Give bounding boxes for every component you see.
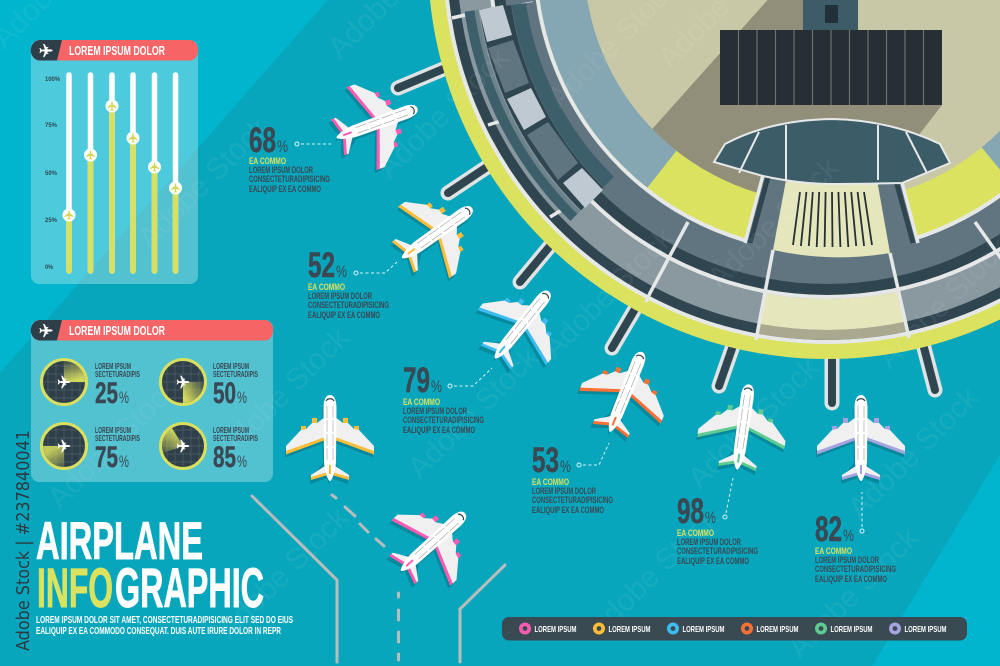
stat 52: CONSECTETURADIPISICING: [308, 300, 389, 311]
title: AIRPLANE: [36, 512, 203, 571]
stat 53: EALIQUIP EX EA COMMO: [532, 505, 604, 516]
radar stat 85: SECTETURADIPIS: [213, 433, 258, 443]
legend bar: [502, 617, 967, 640]
legend labels: LOREM IPSUM: [682, 624, 724, 634]
axis labels: 50%: [45, 170, 57, 177]
axis labels: 0%: [45, 264, 53, 271]
stat 79: EALIQUIP EX EA COMMO: [403, 425, 475, 436]
stat 68: CONSECTETURADIPISICING: [249, 174, 330, 185]
stat 82: CONSECTETURADIPISICING: [815, 564, 896, 575]
panel header: [31, 320, 273, 340]
panel: sliders: [31, 40, 198, 284]
watermarks: Adobe Stock: [212, 321, 356, 465]
radar stat 75: 75: [95, 441, 118, 474]
radar stat 50: LOREM IPSUM: [213, 361, 249, 371]
legend rings: [521, 624, 899, 633]
axis labels: 25%: [45, 217, 57, 224]
stat 98: [677, 478, 758, 567]
plane: purple: [816, 395, 905, 484]
center lower section: [743, 176, 920, 340]
building shadow: [652, 0, 942, 196]
radar stat 85: %: [237, 452, 247, 471]
panel header: [31, 40, 198, 60]
stat 68: %: [277, 137, 288, 156]
stat 53: EA COMMO: [532, 477, 569, 488]
canopy: [714, 119, 950, 184]
radar stat 50: %: [237, 388, 247, 407]
stock id vertical text: Adobe Stock | #237840041: [13, 430, 34, 651]
knob plane icons: [64, 101, 180, 220]
radar 25: [42, 360, 86, 404]
radar stat 85: 85: [213, 441, 236, 474]
radar stat 85: [213, 425, 258, 474]
watermarks: Adobe Stock: [842, 381, 986, 525]
stat 53: LOREM IPSUM DOLOR: [532, 486, 596, 497]
stat 52: [308, 246, 397, 321]
stat 68: [249, 121, 331, 195]
stat 79: LOREM IPSUM DOLOR: [403, 406, 467, 417]
stat 52: EALIQUIP EX EA COMMO: [308, 310, 380, 321]
stat 82: 82: [815, 510, 842, 549]
stat 52: LOREM IPSUM DOLOR: [308, 291, 372, 302]
terminal ring: [430, 0, 1000, 359]
stat 68: LOREM IPSUM DOLOR: [249, 165, 313, 176]
stat 79: CONSECTETURADIPISICING: [403, 415, 484, 426]
slider knobs: [62, 100, 182, 222]
stat 82: [815, 492, 896, 585]
plane: pink runway: [370, 481, 494, 606]
plane: orange: [567, 336, 683, 451]
blue band: [540, 0, 1000, 188]
radar 85: [160, 424, 206, 468]
watermarks: Adobe Stock: [402, 341, 546, 485]
watermarks: Adobe Stock: [537, 221, 681, 365]
radar stat 50: SECTETURADIPIS: [213, 369, 258, 379]
watermarks: Adobe Stock: [212, 501, 356, 645]
subtitle text: EALIQUIP EX EA COMMODO CONSEQUAT. DUIS AUTE IRURE DOLOR IN REPR: [36, 625, 281, 637]
watermarks: Adobe Stock: [782, 521, 926, 665]
radar stat 50: [213, 361, 258, 410]
plane: pink top: [320, 67, 432, 182]
radar stat 25: 25: [95, 377, 118, 410]
plane: green: [692, 378, 793, 479]
radar stat 75: LOREM IPSUM: [95, 425, 131, 435]
stat 53: %: [560, 457, 571, 476]
plane: yellow second: [375, 172, 498, 297]
radar stat 25: [95, 361, 140, 410]
control tower: [803, 0, 858, 32]
legend labels: LOREM IPSUM: [756, 624, 798, 634]
stat 52: 52: [308, 246, 335, 285]
stat 98: EALIQUIP EX EA COMMO: [677, 556, 749, 567]
watermarks: Adobe Stock: [582, 501, 726, 645]
stat 68: 68: [249, 121, 276, 160]
hangar building: [720, 30, 942, 105]
stat 82: LOREM IPSUM DOLOR: [815, 555, 879, 566]
stat 53: CONSECTETURADIPISICING: [532, 495, 613, 506]
watermarks: Adobe Stock: [682, 351, 826, 495]
stat 98: LOREM IPSUM DOLOR: [677, 537, 741, 548]
title: GRAPHIC: [115, 556, 264, 619]
stat 98: 98: [677, 492, 704, 531]
legend labels: LOREM IPSUM: [830, 624, 872, 634]
panel header: LOREM IPSUM DOLOR: [69, 323, 165, 338]
subtitle text: [36, 614, 293, 637]
legend labels: LOREM IPSUM: [904, 624, 946, 634]
radar 50: [160, 360, 206, 404]
stat 53: 53: [532, 441, 559, 480]
stat 53: [532, 441, 613, 516]
stat 82: EALIQUIP EX EA COMMO: [815, 574, 887, 585]
slider tracks: [69, 75, 176, 271]
watermarks: Adobe Stock: [42, 371, 186, 515]
watermarks: Adobe Stock: [372, 41, 516, 185]
legend labels: LOREM IPSUM: [534, 624, 576, 634]
watermarks: Adobe Stock: [702, 151, 846, 295]
gate boxes: [479, 5, 603, 208]
radar stat 85: LOREM IPSUM: [213, 425, 249, 435]
legend labels: LOREM IPSUM: [608, 624, 650, 634]
radar stat 25: LOREM IPSUM: [95, 361, 131, 371]
ring dividers: [452, 3, 1000, 302]
title: INFO: [37, 556, 113, 619]
radar stat 50: 50: [213, 377, 236, 410]
panel header: LOREM IPSUM DOLOR: [69, 43, 165, 58]
radar stat 75: [95, 425, 140, 474]
radar stat 75: SECTETURADIPIS: [95, 433, 140, 443]
radar 75: [42, 424, 86, 468]
gate building wedge: [464, 2, 621, 221]
axis labels: [45, 76, 60, 271]
axis labels: 100%: [45, 76, 60, 83]
stat 82: %: [843, 526, 854, 545]
stat 98: %: [705, 508, 716, 527]
title: [36, 512, 264, 619]
stat 79: 79: [403, 361, 430, 400]
radar stat 75: %: [119, 452, 129, 471]
axis labels: 75%: [45, 122, 57, 129]
stat 98: EA COMMO: [677, 528, 714, 539]
plane: blue: [459, 264, 583, 389]
stat 52: %: [336, 262, 347, 281]
radar stat 25: %: [119, 388, 129, 407]
legend labels: [534, 624, 946, 634]
watermarks: Adobe Stock: [132, 111, 276, 255]
stat 79: EA COMMO: [403, 397, 440, 408]
plane: yellow taxiing: [285, 395, 374, 484]
stat 68: EALIQUIP EX EA COMMO: [249, 184, 321, 195]
stat 82: EA COMMO: [815, 546, 852, 557]
stat 52: EA COMMO: [308, 282, 345, 293]
stat 79: [403, 361, 492, 436]
grid stripes: [793, 192, 872, 247]
panel: radars: [31, 320, 273, 482]
subtitle text: LOREM IPSUM DOLOR SIT AMET, CONSECTETURADIPISICING ELIT SED DO EIUS: [36, 614, 293, 626]
stat 79: %: [431, 377, 442, 396]
stat 68: EA COMMO: [249, 156, 286, 167]
runway lines: [252, 495, 505, 662]
stat 98: CONSECTETURADIPISICING: [677, 546, 758, 557]
radar stat 25: SECTETURADIPIS: [95, 369, 140, 379]
gate stands: [398, 62, 935, 403]
